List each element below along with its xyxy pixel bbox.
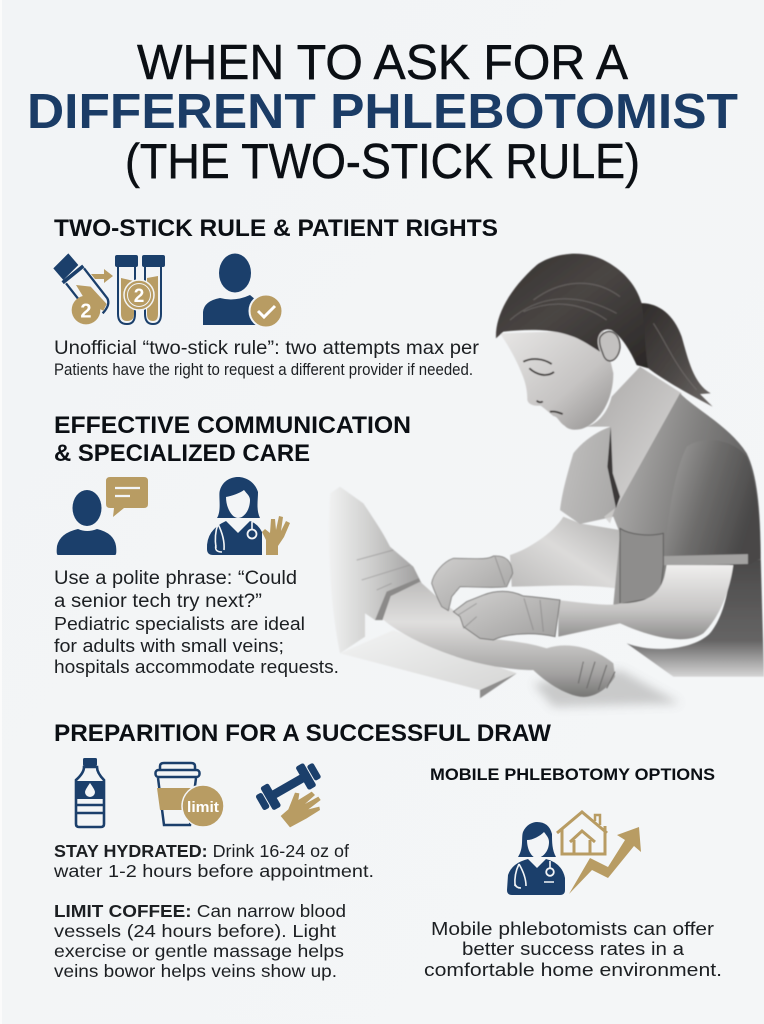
icon: doctor bbox=[507, 822, 565, 895]
icon: coffee cup with limit badge: limit bbox=[187, 799, 219, 816]
section heading: MOBILE PHLEBOTOMY OPTIONS bbox=[430, 766, 715, 784]
ponytail bbox=[637, 303, 713, 407]
face bbox=[500, 330, 613, 430]
ear bbox=[600, 332, 620, 361]
neck and chest bbox=[583, 367, 682, 510]
body text: Use a polite phrase: “Could bbox=[54, 568, 297, 589]
title line 2: DIFFERENT PHLEBOTOMIST bbox=[27, 85, 738, 139]
cuff folds bbox=[458, 557, 543, 632]
scrub top bbox=[560, 393, 761, 605]
icon: tilted test tube: 2 bbox=[80, 300, 92, 322]
patient fingers bbox=[578, 662, 615, 690]
lower glove hand bbox=[453, 591, 560, 640]
title bbox=[27, 36, 738, 189]
patient arm bbox=[383, 582, 615, 697]
body text: better success rates in a bbox=[462, 939, 685, 959]
upper glove hand bbox=[432, 556, 513, 611]
section 4: mobile phlebotomy options bbox=[424, 766, 722, 980]
scrub pocket bbox=[620, 528, 663, 604]
body text: Patients have the right to request a different provider if needed. bbox=[54, 361, 473, 379]
towel bbox=[340, 630, 517, 690]
towel shadow bbox=[480, 673, 517, 698]
icon: two test tubes bbox=[115, 255, 165, 324]
table shadow under hand bbox=[533, 670, 680, 707]
collar seam bbox=[604, 508, 615, 523]
v-neck shadow bbox=[607, 427, 620, 508]
body text: limit coffee: LIMIT COFFEE: Can narrow blood bbox=[54, 901, 346, 921]
illustration: phlebotomist drawing blood bbox=[329, 254, 764, 707]
icon: water bottle bbox=[75, 758, 105, 827]
title line 1: WHEN TO ASK FOR A bbox=[137, 36, 628, 90]
section 1: two-stick rule and patient rights bbox=[53, 215, 498, 379]
body text: vessels (24 hours before). Light bbox=[54, 921, 336, 941]
body text: comfortable home environment. bbox=[424, 960, 722, 980]
section heading: EFFECTIVE COMMUNICATION bbox=[54, 412, 411, 439]
icon: tilted test tube bbox=[53, 253, 108, 324]
title line 3: (THE TWO-STICK RULE) bbox=[125, 135, 640, 189]
cuff bbox=[375, 578, 422, 620]
nurse far arm bbox=[510, 517, 620, 588]
body text: veins bowor helps veins show up. bbox=[54, 961, 337, 981]
body text: Unofficial “two-stick rule”: two attempts max per bbox=[54, 337, 480, 359]
body text: a senior tech try next?” bbox=[54, 591, 262, 612]
icon: coffee cup with limit badge bbox=[156, 763, 224, 827]
icon: patient with check mark bbox=[203, 254, 282, 328]
icon: speech bubble bbox=[106, 477, 148, 517]
body text: Mobile phlebotomists can offer bbox=[431, 919, 714, 939]
icon: house bbox=[557, 812, 607, 854]
icon: two test tubes: 2 bbox=[134, 286, 144, 307]
dark torso below arm bbox=[627, 557, 764, 677]
icon: person bbox=[57, 490, 116, 555]
eye, brow, nose, mouth bbox=[523, 359, 563, 414]
sleeve hem bbox=[664, 554, 748, 565]
section 3: preparation for a successful draw bbox=[53, 720, 551, 981]
patient sleeve bbox=[329, 487, 420, 653]
hair highlights bbox=[510, 283, 697, 390]
icon: arrow bbox=[91, 269, 113, 283]
section heading: TWO-STICK RULE & PATIENT RIGHTS bbox=[54, 215, 498, 242]
body text: for adults with small veins; bbox=[54, 636, 284, 656]
hair bbox=[496, 254, 648, 368]
body text: stay hydrated: STAY HYDRATED: Drink 16-24 oz of bbox=[54, 841, 349, 861]
scrub sleeve bbox=[664, 440, 761, 565]
section 2: effective communication and specialized care bbox=[54, 412, 411, 677]
body text: hospitals accommodate requests. bbox=[54, 657, 339, 677]
icon: doctor with raised hand bbox=[207, 477, 290, 555]
section heading line 2: & SPECIALIZED CARE bbox=[54, 440, 310, 467]
body text: Pediatric specialists are ideal bbox=[54, 614, 305, 634]
right arm bbox=[558, 565, 733, 639]
section heading: PREPARITION FOR A SUCCESSFUL DRAW bbox=[54, 720, 551, 747]
sleeve folds bbox=[357, 550, 410, 590]
body text: water 1-2 hours before appointment. bbox=[53, 861, 374, 881]
icon: dumbbell and hand bbox=[253, 758, 324, 827]
body text: exercise or gentle massage helps bbox=[54, 941, 344, 961]
icon: rising arrow bbox=[569, 827, 641, 894]
